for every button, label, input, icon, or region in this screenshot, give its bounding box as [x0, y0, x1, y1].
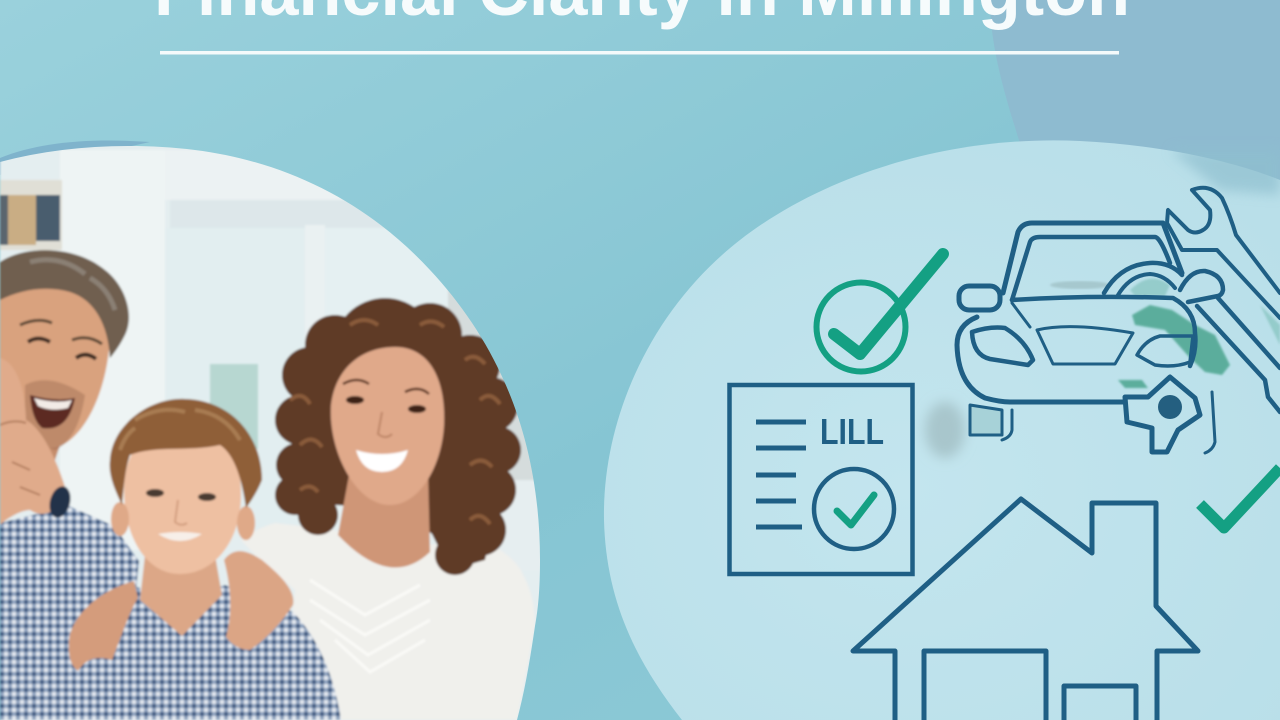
beard shadow	[25, 380, 85, 450]
hair	[0, 250, 129, 358]
neck	[338, 470, 430, 568]
room background	[0, 140, 560, 720]
title underline	[160, 51, 1119, 54]
woman	[241, 298, 535, 720]
icon: car with wrench and gear	[957, 188, 1280, 453]
icon: bill document	[730, 385, 912, 574]
smudge	[1050, 281, 1110, 289]
icon: large check mark in circle	[816, 254, 943, 372]
face	[124, 425, 241, 574]
car roof and windshield	[1003, 223, 1182, 293]
shirt	[52, 585, 341, 720]
wheel arch	[1104, 263, 1182, 293]
icon: house	[853, 499, 1198, 720]
neck	[48, 445, 60, 460]
face	[0, 287, 110, 448]
smudge	[925, 402, 965, 458]
decorative corner shape	[990, 0, 1280, 210]
sweater	[241, 523, 535, 720]
man	[0, 250, 139, 720]
mirror	[959, 286, 1000, 310]
hand with key	[0, 358, 66, 525]
shirt	[0, 506, 139, 720]
hair	[110, 399, 262, 508]
green stains	[1118, 279, 1280, 388]
boy	[52, 399, 341, 720]
smudge	[1170, 150, 1280, 195]
icon: small check mark	[1200, 468, 1280, 528]
hood	[1012, 297, 1195, 366]
wheels	[970, 405, 1002, 435]
neck	[140, 555, 222, 636]
right panel blob	[604, 140, 1280, 720]
left backing shape	[0, 141, 150, 175]
mouth	[30, 395, 75, 428]
man's hand	[69, 581, 138, 671]
car body	[957, 317, 1125, 402]
icon: gear	[1125, 377, 1200, 452]
bill label: LILL	[820, 411, 884, 452]
face	[331, 347, 444, 505]
headlights and grille	[972, 328, 1033, 365]
curly hair	[275, 298, 521, 575]
family photo	[0, 140, 560, 720]
car key	[48, 485, 72, 519]
icon: wrench	[1167, 188, 1280, 318]
woman's hand	[224, 551, 293, 650]
